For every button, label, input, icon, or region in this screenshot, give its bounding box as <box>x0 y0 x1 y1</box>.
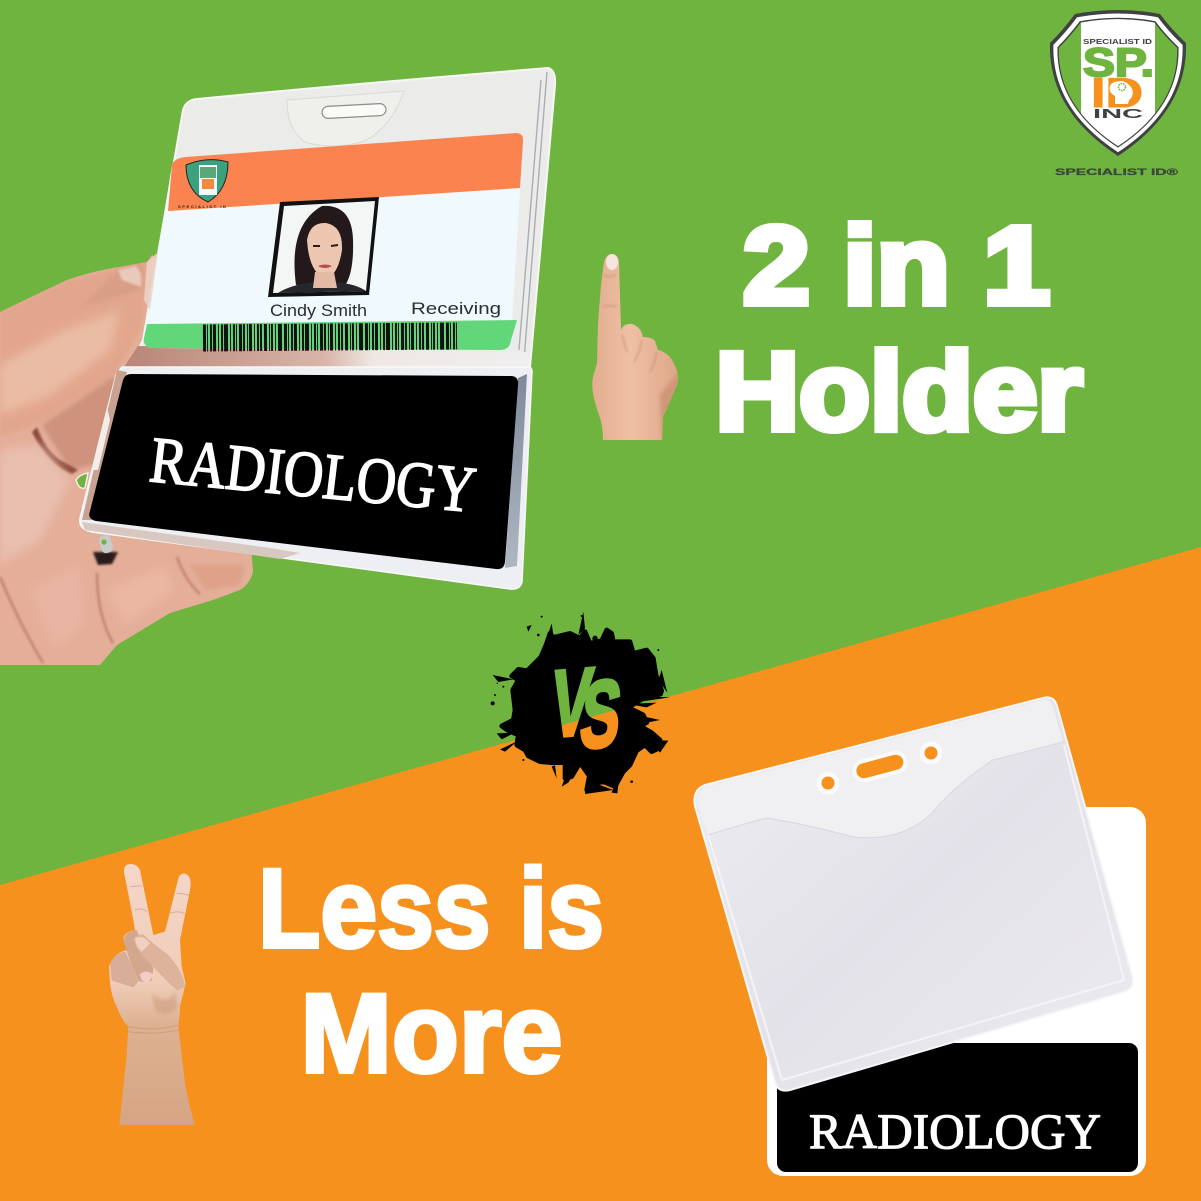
shading: thumb body <box>0 262 147 437</box>
shading: palm highlights <box>0 445 70 565</box>
card body <box>144 133 523 350</box>
shading: web between thumb and fingers <box>42 377 114 470</box>
slot tab <box>287 91 404 146</box>
thumb overlapping card edge <box>144 252 158 310</box>
heading: Holder: Holder <box>716 330 1082 454</box>
logo INC: INC <box>1093 107 1143 121</box>
barcode <box>203 336 457 338</box>
clear holder <box>694 697 1133 1091</box>
heading: 2 in 1: 2 in 1 <box>743 204 1050 328</box>
curled pinky and ring fingers <box>110 952 138 987</box>
top flap <box>698 700 1063 838</box>
thumb <box>133 935 185 991</box>
center slot <box>852 751 907 782</box>
logo wordmark: SPECIALIST ID® <box>1055 167 1178 178</box>
mini logo <box>178 160 228 209</box>
palm folds and wrist lines <box>128 886 189 1033</box>
orange header band <box>168 133 523 211</box>
ID card <box>144 133 523 350</box>
VS lettering: V <box>547 647 597 757</box>
photo: separate badge and plain holder <box>694 697 1146 1176</box>
lower clear pocket <box>80 367 532 589</box>
black badge panel <box>777 1043 1138 1172</box>
pocket side shadow <box>505 374 527 568</box>
band of hand seen through pocket below card <box>118 346 530 376</box>
upper clear pocket <box>130 68 555 367</box>
mini logo: SPECIALIST ID <box>178 204 226 209</box>
icon: logo shield <box>1050 10 1186 178</box>
inner edge seam <box>708 745 1124 1080</box>
holder clip and shadow <box>93 534 118 565</box>
card name: Cindy Smith <box>270 301 367 320</box>
logo ID letters: ID <box>1091 69 1143 116</box>
shield outline <box>1050 10 1186 156</box>
icon: peace sign hand <box>109 864 195 1125</box>
side shading <box>659 374 678 438</box>
hand <box>0 255 253 665</box>
left margin highlight <box>92 407 110 470</box>
card role: Receiving <box>411 299 501 318</box>
badge label: RADIOLOGY <box>809 1103 1101 1159</box>
nails <box>135 937 153 982</box>
heading: More: More <box>300 971 562 1096</box>
flap edge <box>708 742 1063 838</box>
green footer band <box>144 320 517 350</box>
VS splash badge <box>491 612 670 794</box>
icon: pointing finger <box>592 254 680 440</box>
VS lettering: S <box>576 659 626 769</box>
knuckle folds <box>603 275 657 372</box>
ink splat <box>491 612 670 794</box>
lower margin over skin <box>82 522 300 559</box>
icon: head in logo <box>1110 81 1133 104</box>
portrait photo <box>268 197 379 297</box>
right punch hole <box>922 744 940 762</box>
black insert <box>89 374 518 569</box>
lanyard slot <box>322 103 386 119</box>
curled middle finger <box>123 930 153 982</box>
pocket left margin over skin <box>82 370 127 520</box>
photo: hand holding 2-in-1 badge holder <box>0 68 555 665</box>
background: orange diagonal field <box>0 547 1201 1201</box>
heading: Less is: Less is <box>258 846 604 971</box>
finger creases <box>0 557 200 663</box>
fingernail <box>606 254 618 270</box>
logo SP letters: SP. <box>1083 41 1154 85</box>
logo small text: SPECIALIST ID <box>1083 37 1153 46</box>
insert label: RADIOLOGY <box>146 424 480 527</box>
left punch hole <box>819 774 837 792</box>
white badge card <box>767 807 1146 1176</box>
pocket fold lines right edge <box>519 72 547 360</box>
green gap beside holder <box>76 473 88 488</box>
